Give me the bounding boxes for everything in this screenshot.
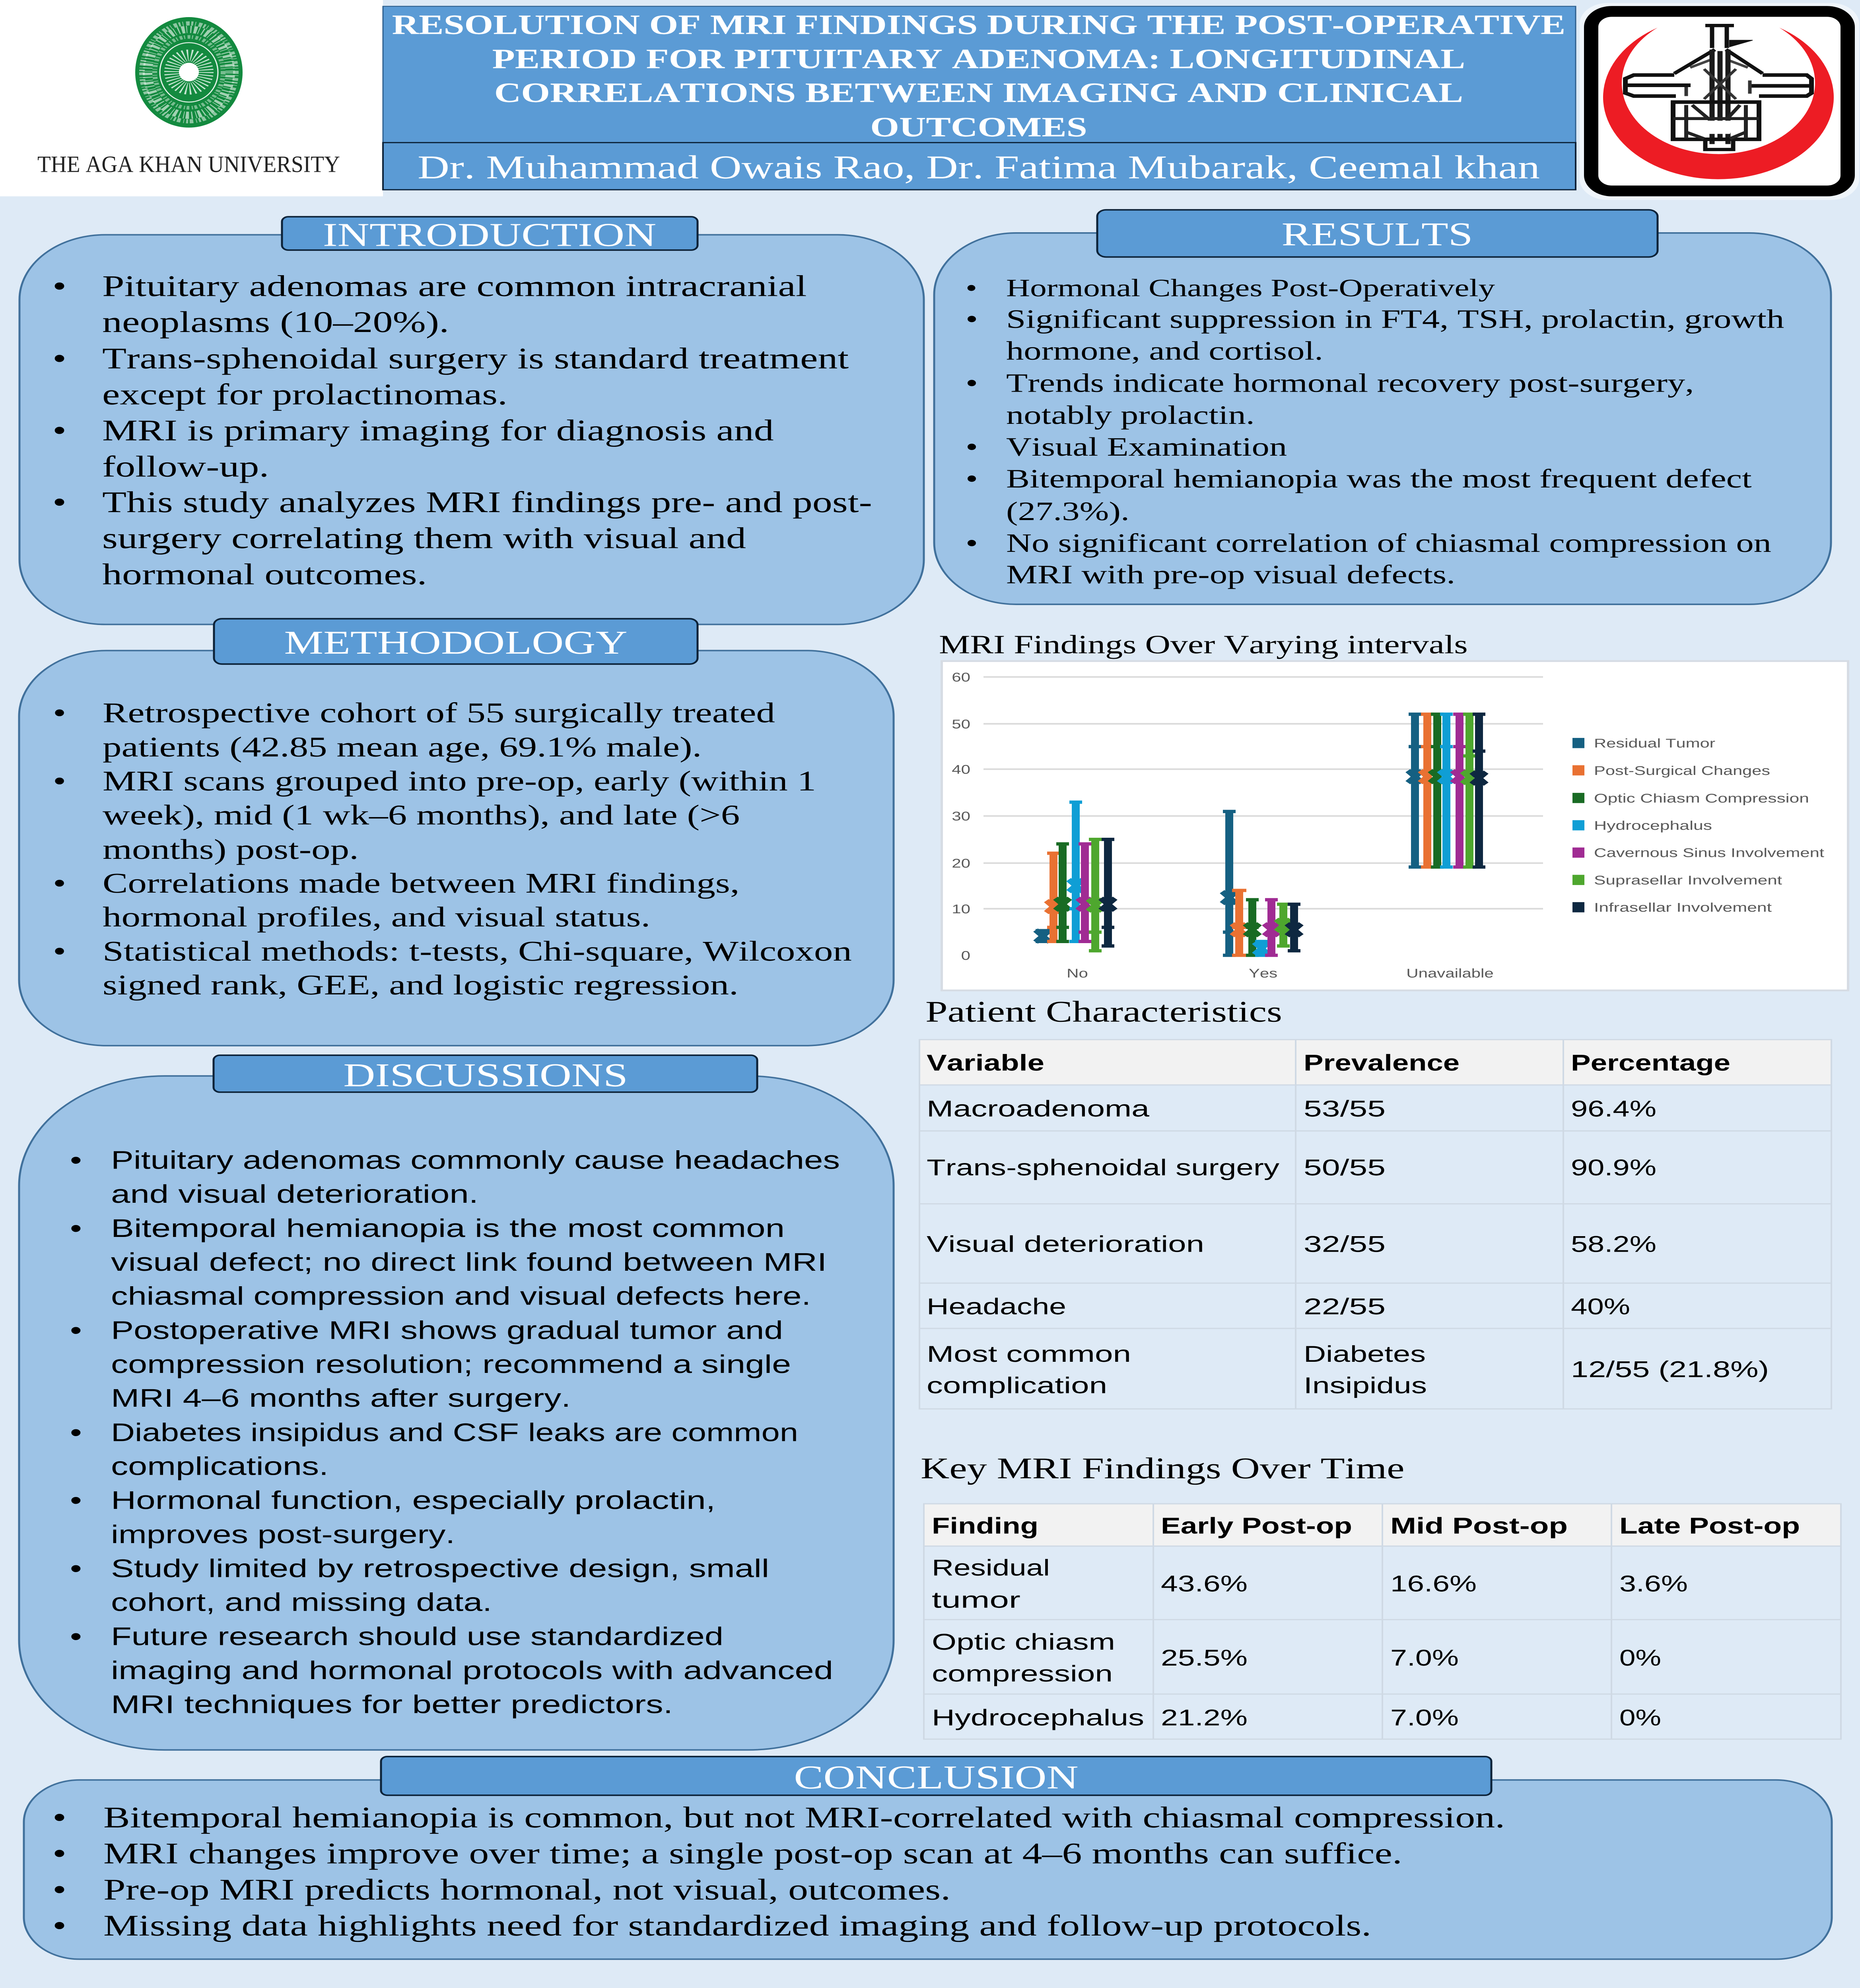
- text block: introduction bullets: except for prolactinomas.: [102, 378, 507, 411]
- table: patient characteristics: complication: [927, 1373, 1107, 1398]
- text block: introduction bullets: •: [52, 414, 66, 447]
- heading: discussions: [214, 1055, 757, 1094]
- logo: red crescent emblem: [1580, 3, 1859, 200]
- text block: methodology bullets: Retrospective cohort of 55 surgically treated: [103, 697, 775, 729]
- text block: methodology bullets: •: [53, 867, 66, 899]
- title text: OUTCOMES: [870, 112, 1087, 143]
- heading: introduction: INTRODUCTION: [323, 216, 656, 253]
- text block: introduction bullets: •: [52, 269, 66, 303]
- table: key MRI findings over time: 16.6%: [1390, 1571, 1477, 1596]
- text block: results bullets: Significant suppression in FT4, TSH, prolactin, growth: [1006, 305, 1784, 334]
- table: patient characteristics: 58.2%: [1571, 1231, 1656, 1257]
- logo: The Aga Khan University: [0, 0, 383, 196]
- text block: results bullets: Visual Examination: [1006, 432, 1287, 462]
- text block: discussion bullets: visual defect; no direct link found between MRI: [111, 1248, 827, 1277]
- text block: conclusion bullets: Bitemporal hemianopia is common, but not MRI-correlated with chiasmal compression.: [103, 1801, 1505, 1834]
- text block: discussion bullets: imaging and hormonal protocols with advanced: [111, 1656, 833, 1685]
- table: key MRI findings over time: Early Post-op: [1161, 1513, 1352, 1539]
- table: patient characteristics: 53/55: [1304, 1096, 1386, 1122]
- heading: methodology: [214, 619, 698, 664]
- table: patient characteristics: 12/55 (21.8%): [1571, 1357, 1769, 1382]
- text block: introduction bullets: Pituitary adenomas are common intracranial: [102, 269, 807, 303]
- table: patient characteristics: 32/55: [1304, 1231, 1386, 1257]
- icon: red crescent: [1603, 27, 1834, 179]
- table: patient characteristics: Headache: [927, 1294, 1066, 1319]
- text block: conclusion bullets: •: [52, 1909, 66, 1942]
- chart heading: MRI Findings Over Varying intervals: [939, 630, 1468, 659]
- text block: discussion bullets: Diabetes insipidus and CSF leaks are common: [111, 1418, 798, 1447]
- x axis labels: [1067, 966, 1494, 980]
- text block: introduction bullets: •: [52, 485, 66, 519]
- text block: results bullets: Bitemporal hemianopia was the most frequent defect: [1006, 464, 1752, 493]
- text block: conclusion bullets: •: [52, 1873, 66, 1906]
- y axis gridlines and labels: 20: [952, 856, 970, 870]
- authors banner: Dr. Muhammad Owais Rao, Dr. Fatima Mubarak, Ceemal khan: [418, 149, 1540, 186]
- text block: discussion bullets: MRI 4–6 months after surgery.: [111, 1384, 571, 1413]
- table: key MRI findings over time: 7.0%: [1390, 1645, 1459, 1671]
- y axis gridlines and labels: 30: [952, 809, 970, 823]
- table: patient characteristics: [919, 1040, 1831, 1409]
- table: key MRI findings over time: Optic chiasm: [932, 1629, 1115, 1655]
- panel: results: [934, 210, 1831, 604]
- text block: methodology bullets: MRI scans grouped into pre-op, early (within 1: [103, 765, 816, 797]
- table: key MRI findings over time: 0%: [1619, 1705, 1661, 1730]
- table: patient characteristics: Variable: [927, 1050, 1044, 1076]
- text block: results bullets: No significant correlation of chiasmal compression on: [1006, 528, 1771, 558]
- table: key MRI findings over time: compression: [932, 1661, 1113, 1687]
- text block: results bullets: •: [966, 274, 977, 302]
- panel: methodology: [19, 619, 894, 1046]
- panel: introduction: [19, 216, 924, 625]
- chart: MRI findings over varying intervals: [942, 661, 1848, 990]
- heading: conclusion: [381, 1757, 1491, 1796]
- y axis gridlines and labels: 60: [952, 670, 970, 684]
- text block: discussion bullets: •: [70, 1418, 82, 1447]
- text block: discussion bullets: •: [70, 1316, 82, 1345]
- chart legend: Cavernous Sinus Involvement: [1594, 846, 1824, 860]
- university name: THE AGA KHAN UNIVERSITY: [37, 151, 340, 177]
- text block: results bullets: Hormonal Changes Post-Operatively: [1006, 274, 1495, 302]
- table: patient characteristics: 96.4%: [1571, 1096, 1656, 1122]
- text block: discussion bullets: [70, 1146, 840, 1719]
- text block: results bullets: (27.3%).: [1006, 497, 1129, 526]
- text block: conclusion bullets: MRI changes improve over time; a single post-op scan at 4–6 months can suffice.: [103, 1837, 1402, 1870]
- text block: results bullets: hormone, and cortisol.: [1006, 336, 1323, 366]
- table: patient characteristics: Macroadenoma: [927, 1096, 1150, 1122]
- text block: discussion bullets: compression resolution; recommend a single: [111, 1350, 791, 1378]
- text block: results bullets: •: [966, 464, 978, 493]
- title text: CORRELATIONS BETWEEN IMAGING AND CLINICAL: [494, 78, 1463, 109]
- text block: discussion bullets: Future research should use standardized: [111, 1622, 723, 1651]
- y axis gridlines and labels: 10: [952, 902, 970, 916]
- text block: introduction bullets: MRI is primary imaging for diagnosis and: [102, 414, 774, 447]
- text block: conclusion bullets: [52, 1801, 1505, 1942]
- heading: results: RESULTS: [1281, 216, 1473, 253]
- text block: conclusion bullets: Missing data highlights need for standardized imaging and follow-up protocols.: [103, 1909, 1371, 1942]
- text block: results bullets: [966, 274, 1784, 589]
- heading: patient characteristics: Patient Characteristics: [925, 995, 1282, 1028]
- text block: results bullets: notably prolactin.: [1006, 400, 1255, 430]
- chart legend: Residual Tumor: [1594, 736, 1715, 750]
- x axis labels: Unavailable: [1406, 966, 1494, 980]
- y axis gridlines and labels: 50: [952, 717, 970, 731]
- text block: discussion bullets: •: [70, 1622, 82, 1651]
- text block: methodology bullets: Statistical methods: t-tests, Chi-square, Wilcoxon: [103, 935, 852, 967]
- text block: methodology bullets: signed rank, GEE, and logistic regression.: [103, 969, 739, 1001]
- table: patient characteristics: 50/55: [1304, 1155, 1386, 1180]
- text block: results bullets: MRI with pre-op visual defects.: [1006, 560, 1455, 589]
- panel: conclusion: [24, 1757, 1832, 1959]
- table: key MRI findings over time: 25.5%: [1161, 1645, 1248, 1671]
- text block: methodology bullets: •: [53, 697, 66, 729]
- x axis labels: Yes: [1249, 966, 1277, 980]
- text block: discussion bullets: •: [70, 1554, 82, 1583]
- text block: discussion bullets: •: [70, 1214, 82, 1242]
- table: patient characteristics: 90.9%: [1571, 1155, 1656, 1180]
- text block: results bullets: •: [966, 368, 978, 398]
- y axis gridlines and labels: 40: [952, 762, 970, 777]
- title banner: [383, 6, 1576, 143]
- text block: discussion bullets: chiasmal compression and visual defects here.: [111, 1282, 811, 1310]
- chart legend: Infrasellar Involvement: [1594, 900, 1772, 914]
- text block: introduction bullets: [52, 269, 872, 591]
- text block: conclusion bullets: Pre-op MRI predicts hormonal, not visual, outcomes.: [103, 1873, 950, 1906]
- icon: green calligraphic roundel: [135, 17, 243, 128]
- text block: discussion bullets: •: [70, 1146, 82, 1175]
- text block: results bullets: Trends indicate hormonal recovery post-surgery,: [1006, 368, 1694, 398]
- text block: discussion bullets: Postoperative MRI shows gradual tumor and: [111, 1316, 783, 1345]
- chart legend: Suprasellar Involvement: [1594, 873, 1782, 887]
- table: key MRI findings over time: [924, 1504, 1841, 1739]
- heading: conclusion: CONCLUSION: [794, 1759, 1079, 1796]
- table: key MRI findings over time: Late Post-op: [1619, 1513, 1800, 1539]
- text block: results bullets: •: [966, 528, 978, 558]
- text block: introduction bullets: This study analyzes MRI findings pre- and post-: [102, 485, 872, 519]
- text block: introduction bullets: neoplasms (10–20%).: [102, 305, 449, 339]
- chart legend: Hydrocephalus: [1594, 818, 1712, 833]
- table: patient characteristics: Visual deterioration: [927, 1231, 1204, 1257]
- table: key MRI findings over time: 43.6%: [1161, 1571, 1248, 1596]
- text block: discussion bullets: cohort, and missing data.: [111, 1588, 492, 1617]
- table: patient characteristics: Prevalence: [1304, 1050, 1460, 1076]
- text block: introduction bullets: Trans-sphenoidal surgery is standard treatment: [102, 342, 849, 375]
- text block: methodology bullets: [53, 697, 852, 1001]
- text block: methodology bullets: months) post-op.: [103, 833, 359, 865]
- text block: results bullets: •: [966, 432, 978, 462]
- table: key MRI findings over time: 3.6%: [1619, 1571, 1688, 1596]
- table: patient characteristics: Diabetes: [1304, 1342, 1426, 1367]
- text block: methodology bullets: patients (42.85 mean age, 69.1% male).: [103, 731, 702, 763]
- chart legend: Post-Surgical Changes: [1594, 763, 1770, 778]
- table: key MRI findings over time: Mid Post-op: [1390, 1513, 1568, 1539]
- series group: Yes: [1222, 812, 1301, 955]
- icon: central emblem: [1625, 25, 1811, 149]
- text block: conclusion bullets: •: [52, 1837, 66, 1870]
- heading: methodology: METHODOLOGY: [284, 624, 628, 661]
- table: key MRI findings over time: Finding: [932, 1513, 1038, 1539]
- text block: discussion bullets: Hormonal function, especially prolactin,: [111, 1486, 715, 1514]
- table: patient characteristics: Trans-sphenoidal surgery: [927, 1155, 1279, 1180]
- text block: discussion bullets: complications.: [111, 1452, 328, 1481]
- text block: methodology bullets: Correlations made between MRI findings,: [103, 867, 739, 899]
- table: key MRI findings over time: Hydrocephalus: [932, 1705, 1144, 1730]
- table: key MRI findings over time: Residual: [932, 1555, 1050, 1580]
- text block: introduction bullets: follow-up.: [102, 450, 269, 483]
- table: patient characteristics: 40%: [1571, 1294, 1630, 1319]
- title text: RESOLUTION OF MRI FINDINGS DURING THE POST-OPERATIVE: [392, 9, 1565, 40]
- table: patient characteristics: 22/55: [1304, 1294, 1386, 1319]
- table: key MRI findings over time: tumor: [932, 1587, 1020, 1613]
- chart legend: Optic Chiasm Compression: [1594, 791, 1809, 805]
- table: patient characteristics: Most common: [927, 1342, 1131, 1367]
- heading: discussions: DISCUSSIONS: [343, 1057, 628, 1094]
- y axis gridlines and labels: [952, 670, 1543, 963]
- y axis gridlines and labels: 0: [961, 948, 970, 963]
- text block: discussion bullets: Study limited by retrospective design, small: [111, 1554, 769, 1583]
- text block: discussion bullets: Pituitary adenomas commonly cause headaches: [111, 1146, 840, 1175]
- table: key MRI findings over time: 7.0%: [1390, 1705, 1459, 1730]
- text block: conclusion bullets: •: [52, 1801, 66, 1834]
- table: patient characteristics: Percentage: [1571, 1050, 1730, 1076]
- text block: introduction bullets: hormonal outcomes.: [102, 557, 427, 591]
- series group: Unavailable: [1408, 714, 1486, 867]
- table: key MRI findings over time: 21.2%: [1161, 1705, 1248, 1730]
- series group: No: [1036, 802, 1115, 951]
- title text: [392, 9, 1565, 143]
- text block: introduction bullets: surgery correlating them with visual and: [102, 522, 746, 555]
- text block: methodology bullets: week), mid (1 wk–6 months), and late (>6: [103, 799, 740, 831]
- text block: methodology bullets: •: [53, 935, 66, 967]
- table: key MRI findings over time: 0%: [1619, 1645, 1661, 1671]
- text block: discussion bullets: MRI techniques for better predictors.: [111, 1690, 673, 1719]
- text block: discussion bullets: improves post-surgery.: [111, 1520, 455, 1549]
- text block: discussion bullets: and visual deterioration.: [111, 1180, 478, 1208]
- text block: discussion bullets: Bitemporal hemianopia is the most common: [111, 1214, 785, 1242]
- text block: results bullets: •: [966, 305, 978, 334]
- x axis labels: No: [1067, 966, 1088, 980]
- table: patient characteristics: Insipidus: [1304, 1373, 1427, 1398]
- panel: discussions: [19, 1055, 894, 1750]
- text block: methodology bullets: hormonal profiles, and visual status.: [103, 901, 650, 933]
- chart legend: [1572, 736, 1824, 914]
- text block: discussion bullets: •: [70, 1486, 82, 1514]
- title text: PERIOD FOR PITUITARY ADENOMA: LONGITUDINAL: [492, 43, 1465, 74]
- text block: methodology bullets: •: [53, 765, 66, 797]
- heading: results: [1097, 210, 1658, 257]
- text block: introduction bullets: •: [52, 342, 66, 375]
- heading: key MRI findings over time: Key MRI Findings Over Time: [921, 1452, 1405, 1485]
